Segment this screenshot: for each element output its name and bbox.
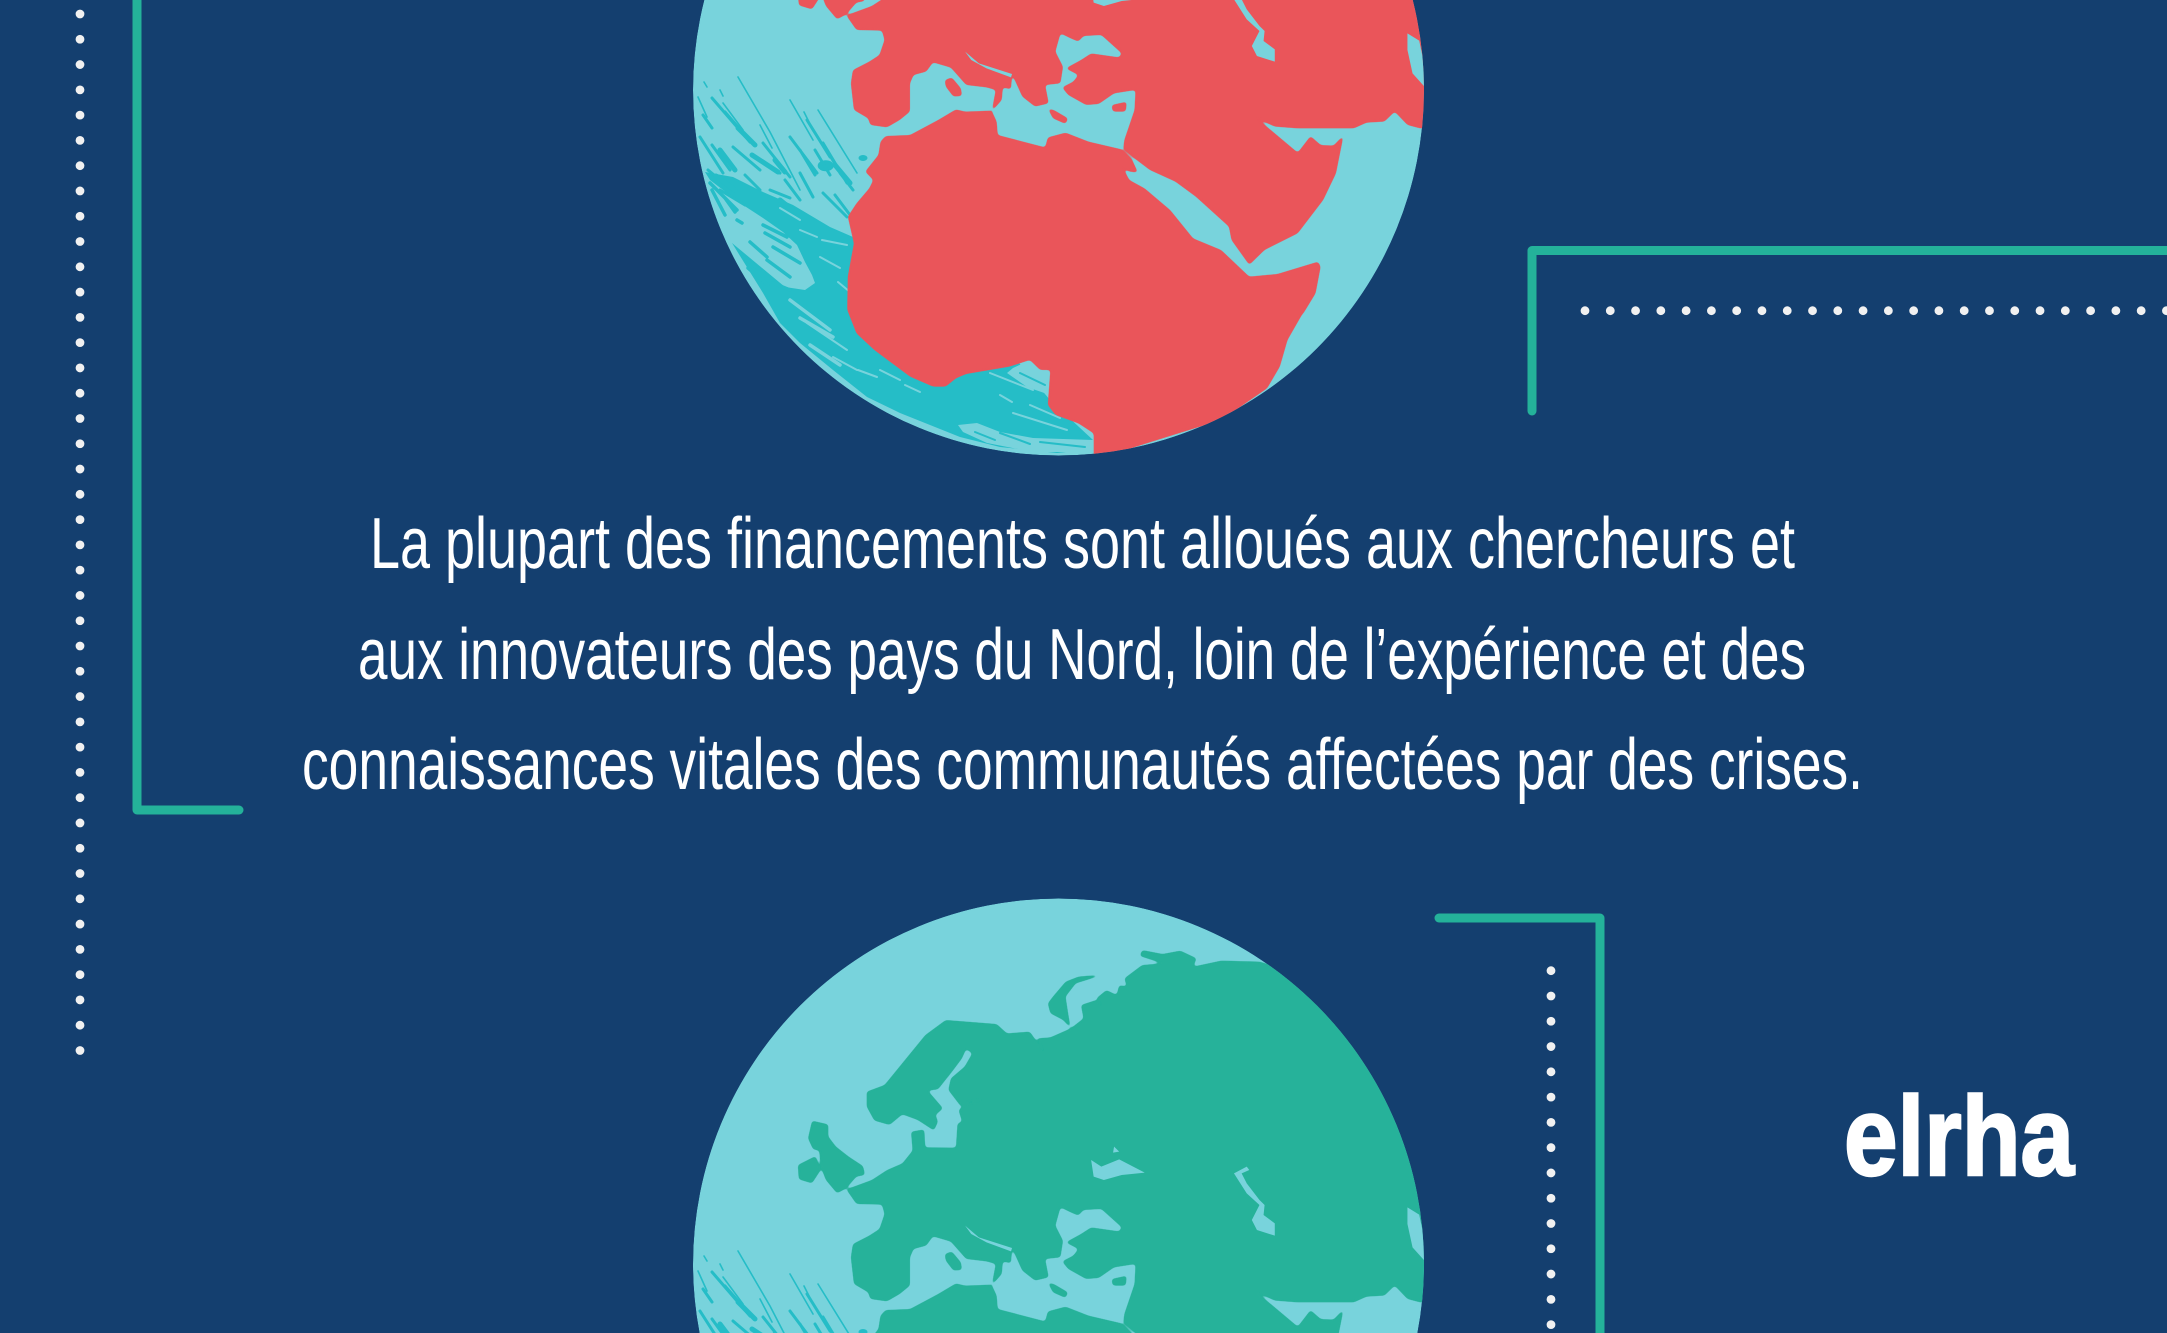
dotted line: far left (76, 14, 84, 1052)
globe: red continents, top (693, 0, 1476, 460)
bracket: upper right (1528, 250, 2167, 416)
logo: elrha: elrha (1844, 1074, 2075, 1199)
main statement text (302, 504, 1863, 805)
globe: green continents, bottom (693, 898, 1476, 1333)
bracket: left (137, 0, 244, 814)
dotted line: lower right (1547, 971, 1555, 1327)
dotted line: upper right (1585, 306, 2167, 315)
bracket: lower right (1434, 914, 1600, 1333)
